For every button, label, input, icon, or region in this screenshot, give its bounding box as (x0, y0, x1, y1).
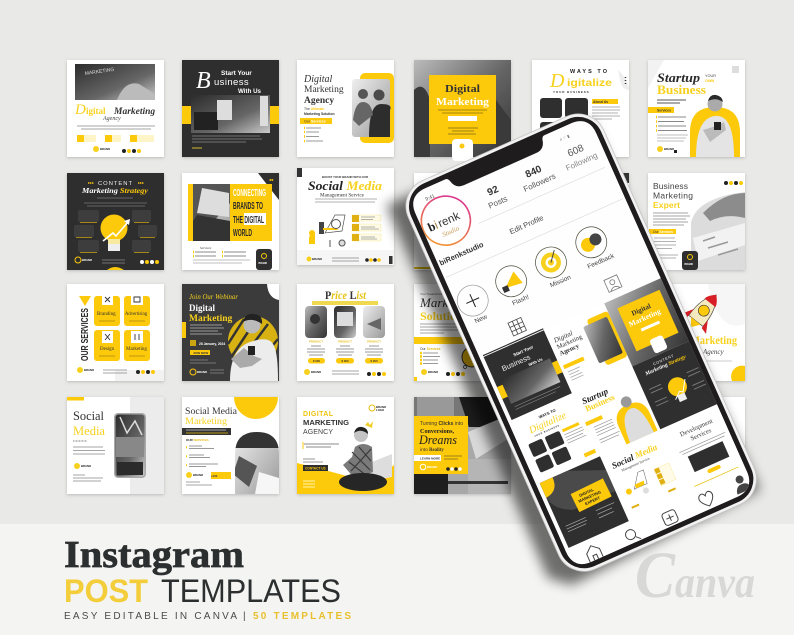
phone mockup (397, 105, 765, 580)
panel: template card Ways to Digitalize: igitalize (567, 78, 613, 89)
icon: search (625, 529, 642, 540)
profile avatar: i (432, 218, 440, 232)
title: Instagram Post Templates (64, 534, 351, 622)
grid post: Digital Marketing Agency: Digital (552, 329, 574, 345)
panel: template card Content Marketing Strategy: Marketing Strategy (81, 186, 149, 195)
panel: template card rocket Digital Marketing: Agency (702, 348, 724, 356)
rocket icon (678, 285, 729, 337)
highlights (456, 226, 608, 316)
profile stats: Posts (487, 194, 509, 211)
panel: template card Social Media Management (297, 168, 394, 265)
panel: template card Ways to Digitalize: D (549, 70, 565, 92)
panel: template card behind phone, row 3 column 5 (532, 284, 629, 381)
panel: template card Business Marketing Expert (648, 173, 745, 270)
man in yellow arch (690, 95, 740, 157)
bottom tab bar (565, 469, 750, 564)
grid post: Content Marketing Strategy: CONTENT (653, 354, 675, 366)
title: B (196, 68, 211, 94)
title: Media (73, 424, 105, 438)
brand dots (724, 181, 743, 185)
heading: Post Templates: POST (64, 573, 148, 609)
grid post: Startup Business: Business (584, 392, 617, 414)
title: Marketing (189, 314, 233, 324)
panel: template card Ways to Digitalize (532, 60, 629, 157)
footer: BRAND (311, 370, 321, 374)
profile stats (487, 144, 598, 208)
yellow text panel: Conversions, (420, 429, 455, 435)
panel: template card Ways to Digitalize: YOUR BUSINESS (553, 90, 590, 94)
icon: tagged tab (604, 275, 622, 292)
title (189, 293, 238, 324)
logo: BRAND (376, 405, 386, 409)
grid post: Social Media: Social Media (610, 442, 659, 471)
headline (233, 188, 266, 239)
panel: template card Start Your Business (182, 60, 279, 157)
title: usiness (214, 77, 249, 88)
grid post: Digital Marketing Expert (540, 456, 629, 548)
product labels: PRODUCT (309, 340, 323, 344)
edit profile: Edit Profile (508, 213, 545, 236)
panel: template card Connecting Brands: CONNECTING (233, 188, 266, 199)
price pills: $ 000 (313, 359, 320, 363)
phone screen (413, 121, 750, 564)
title: Marketing (185, 417, 227, 427)
title: igital (86, 106, 106, 116)
subtitle (64, 611, 351, 622)
grid post: Digital Marketing Expert: MARKETING (578, 489, 602, 504)
title (196, 68, 262, 95)
grid post: Start Your Business (484, 330, 572, 420)
account name: biRenkstudio (438, 240, 485, 267)
logo (369, 405, 386, 412)
title: MARKETING (303, 420, 350, 427)
title (653, 181, 693, 210)
title: Your Trusted Partner (420, 292, 446, 296)
panel: template card Marketing Solution (414, 284, 511, 381)
phone body (397, 105, 765, 580)
dark service tiles (540, 98, 588, 142)
logo tile (452, 139, 473, 161)
title: Join Our Webinar (189, 293, 238, 301)
services: Services (200, 246, 212, 250)
yellow text panel (414, 416, 468, 474)
highlight labels: Flash! (511, 294, 531, 307)
title: Digital (303, 74, 333, 85)
product labels: PRODUCT (367, 340, 381, 344)
logo: BRAND (81, 464, 91, 468)
product labels: PRODUCT (338, 340, 352, 344)
profile stats: Following (564, 151, 599, 173)
our services list: Our Services (420, 347, 441, 351)
dark banner (182, 428, 231, 435)
panel: template card Social Media Management: Management Service (320, 192, 365, 198)
panel: template card Connecting Brands (182, 173, 279, 270)
title: With Us (238, 88, 262, 95)
profile avatar: b (426, 219, 438, 235)
title: YOUR (705, 74, 716, 78)
six dark boxes (74, 210, 157, 252)
illustration circle (462, 347, 482, 368)
yellow text panel: Dreams (418, 432, 457, 447)
subtitle: 50 TEMPLATES (253, 611, 351, 622)
panel: template card Digital Marketing Agency with photo: Marketing Solution (304, 112, 335, 116)
title: Digital (445, 84, 480, 95)
grid post: Digital Marketing Agency: Agency (559, 342, 581, 357)
product labels (309, 340, 381, 344)
panel: template card Content Marketing Strategy (67, 173, 164, 270)
title (74, 102, 155, 122)
profile avatar: renk (437, 210, 462, 230)
grid post: Start Your Business: Business (500, 352, 532, 373)
footer: BRAND (82, 258, 92, 262)
brand logo: BRAND (100, 147, 110, 151)
title: Start Your (221, 70, 252, 77)
title: Digital (189, 303, 215, 313)
phone shadow (386, 120, 760, 585)
panel: template card Startup Your Own Business (648, 60, 745, 157)
title: OWN (705, 79, 715, 83)
vertical heading: OUR SERVICES (80, 308, 91, 361)
title: Business (657, 83, 706, 97)
grid post: Digital Marketing Expert: EXPERT (584, 495, 601, 506)
button: JOIN NOW (193, 351, 208, 355)
panel: template card Social Media Marketing: OUR SERVICES (186, 438, 209, 442)
highlight labels: New (474, 313, 489, 325)
yellow text panel: into Reality (420, 447, 444, 453)
service tiles: Design (100, 347, 115, 352)
grid post: Digital Marketing yellow: Digital (630, 302, 652, 318)
grid post: Social Media: Management Service (621, 456, 651, 472)
profile stats: Followers (522, 172, 557, 194)
background photo: desk and laptop (414, 397, 511, 494)
product photos (305, 306, 385, 338)
highlight labels: Mission (549, 274, 572, 289)
subtitle: EASY EDITABLE IN CANVA (64, 611, 237, 622)
service tiles: Advertising (125, 312, 148, 317)
services bar: Services (657, 108, 671, 112)
three service chips (77, 135, 154, 142)
brand logo: BRAND (664, 147, 674, 151)
panel: template card rocket Digital Marketing (648, 284, 745, 381)
title: Business (653, 181, 688, 191)
panel: template card Social Media Management: BOOST YOUR BRAND WITH OUR (322, 175, 369, 179)
marketing illustration (309, 215, 345, 247)
headline: BRANDS TO (233, 201, 263, 212)
grid post: Content Marketing Strategy (632, 340, 721, 429)
title: AGENCY (303, 429, 333, 436)
photo with yellow frame (352, 73, 394, 143)
panel: template card behind phone, row 2 column 4 (414, 173, 511, 270)
our services bar: Our Services (653, 230, 673, 234)
highlight labels (472, 252, 618, 325)
grid post: Startup Business: Startup (580, 386, 610, 406)
profile stats: 608 (566, 143, 586, 160)
title (303, 411, 350, 436)
logo and yellow tag (186, 472, 231, 479)
logo tile: BRAND (258, 262, 267, 265)
logo: BRAND (197, 370, 207, 374)
title: WAYS TO (570, 69, 608, 75)
title (657, 70, 716, 97)
footer: BRAND (84, 368, 94, 372)
grid post: Start Your Business: With Us (528, 356, 544, 367)
panel: template card Digital Marketing Agency with photo (297, 60, 394, 157)
panel: template card Our Services (67, 284, 164, 381)
arched photo (233, 432, 279, 494)
icon: home (586, 545, 604, 562)
yellow bar (414, 337, 504, 344)
profile stats: 840 (524, 164, 544, 181)
title: CONTENT (98, 181, 133, 187)
headline: WORLD (233, 228, 252, 239)
title: Social Media (308, 178, 383, 193)
photo: hands and papers (691, 192, 745, 270)
photo: laptop: MARKETING (84, 67, 115, 77)
panel: template card Price List (297, 284, 394, 381)
panel: template card Digital Marketing yellow panel: Marketing (436, 96, 490, 108)
icon: add (661, 509, 679, 526)
title: Agency (304, 96, 334, 106)
title: Social Media (185, 407, 238, 417)
yellow text panel: Turning Clicks into (420, 421, 463, 427)
icon: feedback heads (581, 233, 602, 252)
title (185, 407, 238, 427)
grid post: Digital Marketing yellow (604, 277, 693, 366)
date: 28 January, 2024 (199, 342, 225, 346)
footer: BRAND (428, 370, 438, 374)
panel: template card Join Our Webinar (182, 284, 279, 381)
lightbulb with rising arrow (100, 214, 130, 251)
headline: THE DIGITAL (233, 215, 264, 226)
service tiles (94, 294, 150, 361)
logo and yellow tag: BRAND (193, 473, 203, 477)
phone screen: 9:41 (425, 193, 436, 203)
title: Marketing (653, 190, 693, 200)
grid post: Social Media (600, 430, 676, 521)
profile stats: 92 (486, 184, 501, 199)
title (73, 409, 105, 438)
title: Marketing (304, 85, 344, 95)
grid post: Digital Marketing Agency: Marketing (556, 333, 584, 351)
heading: Post Templates (64, 573, 341, 609)
panel: template card Turning Clicks into Conversions (414, 397, 511, 494)
panel: template card behind phone, row 2 column 5 (532, 173, 629, 270)
footer: BRAND (312, 257, 322, 261)
price pills: $ 000 (342, 359, 349, 363)
grid post: Ways to Digitalize: YOUR BUSINESS (534, 424, 560, 438)
laptop photo (193, 184, 230, 241)
logo and yellow tag: +000 (211, 474, 218, 478)
photo and yellow tabs (182, 95, 279, 133)
title: Agency (102, 116, 121, 122)
grid post: Content Marketing Strategy: Marketing Strategy (644, 354, 688, 378)
title: D (74, 102, 86, 118)
grid post: Digital Marketing Agency (544, 312, 627, 393)
grid post: Development Services: Development (679, 418, 714, 438)
service tiles: Marketing (126, 347, 147, 352)
our services bar: Our Services (304, 120, 326, 124)
title: DIGITAL (303, 411, 334, 418)
panel: template card Digital Marketing yellow panel (414, 60, 511, 161)
man with laptop (339, 421, 392, 491)
title: Digital Marketing (658, 333, 737, 347)
title: Social (73, 409, 105, 423)
logo: LOGO (376, 408, 385, 412)
highlight labels: Feedback (586, 252, 616, 271)
grid post: Ways to Digitalize (512, 393, 596, 472)
icon: target (541, 250, 561, 272)
panel: template card Social Media phone (67, 397, 164, 494)
panel: template card behind phone, row 4 column 6 (648, 397, 745, 494)
profile avatar: Studio (441, 224, 461, 239)
panel: template card Digital Marketing Agency (67, 60, 164, 157)
yellow text panel: BRAND (427, 465, 437, 469)
title: Expert (653, 200, 680, 210)
title: Startup (657, 70, 701, 85)
price pills: $ 000 (370, 359, 378, 363)
logo tile: BRAND (684, 263, 693, 266)
panel: template card Social Media Marketing (182, 397, 279, 494)
panel: template card Digital Marketing Agency contact (297, 397, 394, 494)
title (419, 292, 475, 323)
panel: template card Digital Marketing Agency with photo: The Ultimate (304, 107, 324, 111)
three feature rows (352, 215, 381, 241)
phone screen: ıl ⌔ ▮ (559, 133, 570, 142)
icon: grid tab (508, 318, 526, 336)
man with phone and stripes (228, 314, 278, 381)
grid post: Startup Business (582, 390, 658, 444)
title: Price List (325, 288, 367, 302)
grid post: Ways to Digitalize: WAYS TO (538, 408, 556, 420)
panel: template card Connecting Brands: ◂◂ (268, 177, 274, 182)
grid post: Digital Marketing Expert: DIGITAL (578, 487, 595, 498)
icon: heart (698, 490, 714, 506)
title: Marketing (113, 107, 155, 117)
profile avatar (420, 195, 472, 246)
bottom title band (0, 524, 794, 635)
price pills (308, 358, 383, 364)
grid post: Ways to Digitalize: Digitalize (527, 410, 569, 437)
grid post: Development Services (660, 404, 746, 487)
heading: Instagram: Instagram (64, 534, 244, 576)
icon: megaphone (502, 272, 523, 293)
service tiles: Branding (97, 312, 116, 317)
grid post: Start Your Business: Start Your (512, 344, 534, 358)
heading: Post Templates: TEMPLATES (161, 573, 341, 609)
phone mockup (114, 413, 146, 478)
panel: template card behind phone, row 4 column 5 (532, 397, 629, 494)
watermark: Canva: Canva (635, 539, 755, 612)
title: Solution (420, 309, 463, 323)
icon: profile (736, 476, 749, 495)
grid post: Digital Marketing yellow: Marketing (627, 306, 662, 329)
grid post: Development Services: Services (690, 427, 713, 442)
contact button: CONTACT US (305, 466, 326, 470)
subtitle: | (243, 611, 246, 622)
title: Marketing (419, 295, 475, 310)
yellow text panel: LEARN MORE (420, 456, 440, 460)
title (303, 74, 344, 106)
about us: About Us (593, 100, 608, 104)
